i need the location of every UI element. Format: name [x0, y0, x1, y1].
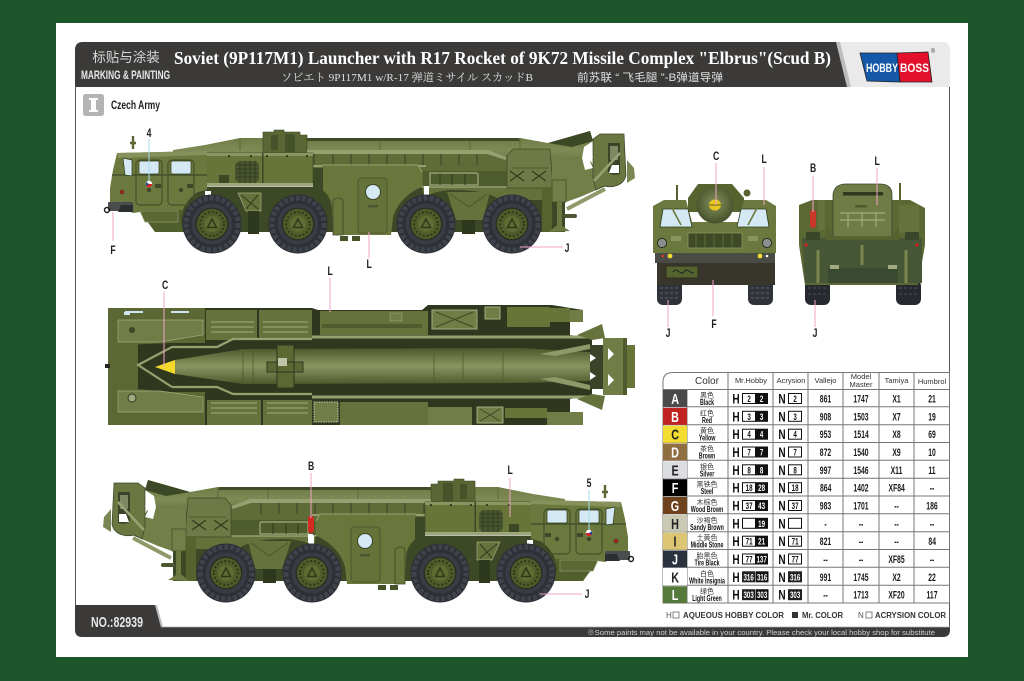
row A: A: [671, 390, 679, 407]
row L: 303: [790, 590, 801, 601]
japanese subtitle: ソビエト 9P117M1 w/R-17 弹道ミサイル スカッドB: [281, 70, 533, 84]
table grid: [663, 372, 950, 603]
table headers: Vallejo: [815, 376, 836, 385]
row H: --: [894, 518, 899, 530]
row A: 21: [928, 393, 936, 405]
side panels upper: [206, 310, 257, 340]
table headers: Humbrol: [918, 377, 947, 386]
row B: 3: [747, 411, 751, 422]
row I: N: [778, 534, 786, 550]
rear view vehicle: [799, 156, 925, 340]
row I: 21: [758, 536, 765, 547]
row G: [663, 497, 938, 514]
row J: 137: [756, 554, 767, 565]
row D: Brown: [699, 453, 715, 461]
row G: 1701: [853, 500, 869, 512]
row G: 37: [792, 501, 799, 511]
row H: 19: [758, 518, 765, 529]
row J: XF85: [888, 553, 905, 565]
row K: 白色: [700, 569, 714, 578]
row L: Light Green: [692, 595, 722, 604]
row A: 861: [820, 393, 831, 405]
row B: H: [732, 409, 740, 425]
main title: Soviet (9P117M1) Launcher with R17 Rocket of 9K72 Missile Complex "Elbrus"(Scud B): [174, 48, 831, 69]
row C: 953: [820, 429, 831, 441]
callouts rear: B: [810, 163, 817, 175]
row F: 1402: [853, 482, 869, 494]
row E: 997: [820, 464, 831, 476]
front wheels: [657, 280, 773, 305]
row D: 7: [793, 447, 797, 458]
row A: Black: [700, 399, 714, 407]
row D: [663, 444, 936, 461]
row E: 8: [747, 465, 751, 476]
callout L: [507, 465, 513, 517]
row G: --: [894, 500, 899, 512]
row H: --: [930, 518, 934, 530]
row C: 1514: [854, 429, 869, 441]
row D: D: [671, 444, 679, 461]
colour table: [663, 372, 950, 604]
row E: 银色: [700, 462, 714, 471]
row B: B: [671, 408, 679, 425]
logo: Hobby Boss: [860, 48, 936, 82]
row I: 71: [746, 536, 753, 547]
row C: 69: [928, 429, 936, 441]
cradle cross: [267, 345, 303, 388]
row E: 1546: [853, 464, 869, 476]
row I: 土黄色: [696, 533, 718, 542]
row A: 2: [747, 394, 751, 404]
scheme badge: [83, 94, 104, 116]
row I: Middle Stone: [691, 542, 724, 550]
row H: H: [671, 515, 679, 532]
footer bar: [75, 605, 950, 637]
row C: [663, 426, 936, 443]
row A: 2: [793, 394, 797, 404]
row G: 43: [758, 501, 765, 511]
product number: NO.:82939: [91, 614, 143, 631]
callout F: F: [110, 245, 116, 257]
row G: N: [778, 498, 786, 514]
row A: X1: [892, 393, 901, 405]
row K: 22: [928, 571, 936, 583]
row E: 8: [760, 465, 764, 476]
row H: --: [859, 518, 863, 530]
table headers: Color: [695, 376, 720, 387]
row F: 28: [758, 483, 765, 494]
row F: [663, 479, 934, 497]
row E: E: [671, 462, 679, 479]
table headers: [695, 372, 947, 389]
row J: --: [823, 553, 828, 565]
row B: [663, 408, 936, 425]
callout C: [162, 280, 169, 367]
row F: --: [930, 482, 934, 494]
callouts front: [666, 151, 767, 340]
left side view vehicle: [104, 128, 635, 271]
row B: 3: [760, 411, 764, 422]
row B: N: [778, 409, 786, 425]
top view vehicle: [105, 266, 635, 425]
callout L top: [327, 266, 333, 312]
row G: 木棕色: [696, 498, 718, 506]
row F: N: [778, 480, 786, 496]
row G: Wood Brown: [691, 506, 723, 514]
row J: 77: [792, 554, 799, 565]
row F: 18: [746, 483, 753, 494]
flag marking 5: 5: [587, 478, 592, 490]
row L: 303: [743, 590, 754, 601]
row I: --: [859, 536, 863, 548]
chinese subtitle: 前苏联 “ 飞毛腿 ”-B弹道导弹: [577, 70, 723, 84]
flag marking 5: [586, 478, 592, 536]
row E: [663, 461, 936, 479]
row I: 71: [792, 536, 799, 547]
rear wheels: [805, 280, 921, 305]
row F: F: [672, 479, 678, 497]
row J: 77: [746, 554, 753, 565]
row F: XF84: [889, 482, 906, 494]
header band: [75, 42, 950, 87]
flag marking 4: [146, 128, 152, 187]
row L: 117: [927, 589, 937, 601]
paint legend: AQUEOUS HOBBY COLOR: [683, 611, 784, 620]
row B: 红色: [700, 408, 714, 417]
callout J: [520, 243, 570, 255]
row L: L: [672, 586, 678, 604]
row L: XF20: [888, 589, 905, 601]
table headers: Mr.Hobby: [735, 376, 767, 385]
paint legend: H: [666, 611, 672, 620]
callout J: J: [565, 243, 570, 255]
row E: X11: [891, 464, 902, 476]
callout B: [308, 461, 315, 518]
row G: G: [671, 497, 679, 514]
launcher frame behind missile: [688, 184, 744, 212]
row F: 黑铁色: [696, 480, 718, 489]
logo: Hobby Boss: BOSS: [900, 61, 929, 75]
row A: N: [778, 391, 786, 407]
row C: N: [778, 427, 786, 443]
row K: 991: [820, 571, 831, 583]
callouts front: J: [666, 328, 671, 340]
row G: 37: [746, 501, 753, 511]
table headers: Tamiya: [885, 376, 909, 385]
row E: H: [732, 462, 740, 478]
callouts rear: L: [874, 156, 880, 168]
row H: H: [732, 516, 740, 532]
row D: X9: [892, 446, 901, 458]
row B: 3: [793, 411, 797, 422]
row A: H: [732, 391, 740, 407]
paint legend: [666, 611, 946, 620]
row H: N: [778, 516, 786, 532]
row E: 11: [928, 464, 936, 476]
row B: 908: [820, 411, 831, 423]
callouts rear: J: [813, 328, 818, 340]
row K: N: [778, 569, 786, 585]
row G: 983: [820, 500, 831, 512]
callouts front: L: [761, 154, 767, 166]
table headers: Model: [851, 372, 872, 381]
front view vehicle: [653, 151, 776, 340]
callout L: L: [507, 465, 513, 477]
scheme name: Czech Army: [111, 98, 160, 112]
row C: C: [671, 426, 679, 443]
row I: --: [894, 536, 899, 548]
paint legend: ACRYSION COLOR: [875, 611, 946, 620]
logo: Hobby Boss: HOBBY: [866, 61, 898, 75]
row B: 19: [928, 411, 936, 423]
row J: J: [672, 551, 678, 568]
callout L: [366, 232, 372, 271]
row G: H: [732, 498, 740, 514]
row H: Sandy Brown: [690, 524, 724, 532]
row D: H: [732, 444, 740, 460]
paint legend: Mr. COLOR: [802, 611, 843, 620]
row L: H: [732, 587, 740, 603]
logo: Hobby Boss: ®: [931, 48, 936, 55]
callout L: L: [366, 259, 372, 271]
callout L top: L: [327, 266, 333, 278]
row I: 84: [928, 536, 937, 548]
row D: 7: [760, 447, 764, 458]
row B: X7: [892, 411, 901, 423]
callouts rear: [810, 156, 880, 340]
row A: 1747: [853, 393, 869, 405]
row J: --: [859, 553, 863, 565]
callouts front: C: [713, 151, 720, 163]
row L: [663, 586, 937, 604]
row C: H: [732, 427, 740, 443]
footnote: ※Some paints may not be available in your country. Please check your local hobby shop for substitute: [587, 628, 935, 637]
row I: I: [674, 533, 676, 550]
row C: X8: [892, 429, 901, 441]
heading: marking and painting chinese: 标贴与涂装: [92, 50, 160, 65]
row J: Tire Black: [694, 560, 720, 568]
row J: --: [930, 553, 934, 565]
row H: 沙褐色: [696, 515, 718, 524]
table headers: Master: [850, 380, 873, 389]
row A: 2: [760, 394, 764, 404]
right side view vehicle: [103, 461, 634, 602]
callouts front: F: [711, 319, 717, 331]
row I: [663, 533, 937, 550]
row J: N: [778, 551, 786, 567]
row H: -: [824, 518, 827, 530]
row E: Silver: [700, 470, 715, 479]
row C: 4: [793, 429, 797, 440]
extinguisher side: [308, 516, 314, 533]
row C: 4: [760, 429, 764, 440]
paint legend: N: [858, 611, 864, 620]
row A: [663, 390, 936, 407]
row D: 872: [820, 446, 831, 458]
callout F: [110, 212, 116, 257]
row K: 316: [790, 572, 801, 583]
row I: 821: [820, 536, 831, 548]
yellow nose: [155, 360, 175, 374]
row K: H: [732, 569, 740, 585]
row C: Yellow: [699, 435, 716, 443]
heading: marking and painting: MARKING & PAINTING: [81, 68, 170, 82]
row K: 316: [743, 572, 754, 583]
row L: N: [778, 587, 786, 603]
row J: [663, 550, 934, 568]
row K: 316: [757, 572, 768, 583]
row B: Red: [702, 417, 712, 425]
row C: 4: [747, 429, 751, 440]
flag marking 4: 4: [147, 128, 152, 140]
row D: N: [778, 444, 786, 460]
row L: 1713: [853, 589, 869, 601]
row D: 10: [928, 446, 936, 458]
missile body: [155, 348, 590, 384]
extinguisher: [810, 210, 816, 228]
row E: 8: [793, 465, 797, 476]
row D: 茶色: [700, 444, 714, 453]
callout B: B: [308, 461, 315, 473]
missile nose: [696, 186, 750, 224]
row K: White Insignia: [689, 577, 725, 586]
row C: 黄色: [700, 426, 714, 435]
row L: 绿色: [700, 587, 714, 596]
side panels lower: [207, 400, 261, 425]
row F: 864: [820, 482, 832, 494]
rails: [138, 339, 312, 394]
tail: [540, 344, 590, 390]
row K: 1745: [853, 571, 869, 583]
callout J: J: [585, 589, 590, 601]
row A: 黑色: [700, 390, 714, 400]
row L: --: [823, 589, 828, 601]
row L: 303: [757, 590, 768, 601]
row F: H: [732, 480, 740, 496]
row H: [663, 515, 934, 532]
row B: 1503: [853, 411, 869, 423]
row J: 胎黑色: [696, 551, 718, 560]
row D: 1540: [853, 446, 869, 458]
row F: Steel: [701, 488, 713, 497]
table headers: Acrysion: [777, 376, 805, 385]
row F: 18: [792, 483, 799, 494]
row K: K: [671, 569, 679, 586]
chassis: [108, 305, 592, 425]
row I: H: [732, 534, 740, 550]
row E: N: [778, 462, 786, 478]
row G: 186: [926, 500, 938, 512]
panel border: [76, 42, 950, 636]
row J: H: [732, 551, 740, 567]
row K: X2: [892, 571, 901, 583]
callout C: C: [162, 280, 169, 292]
row K: [663, 568, 936, 586]
callout J: [540, 589, 590, 601]
row D: 7: [747, 447, 751, 458]
